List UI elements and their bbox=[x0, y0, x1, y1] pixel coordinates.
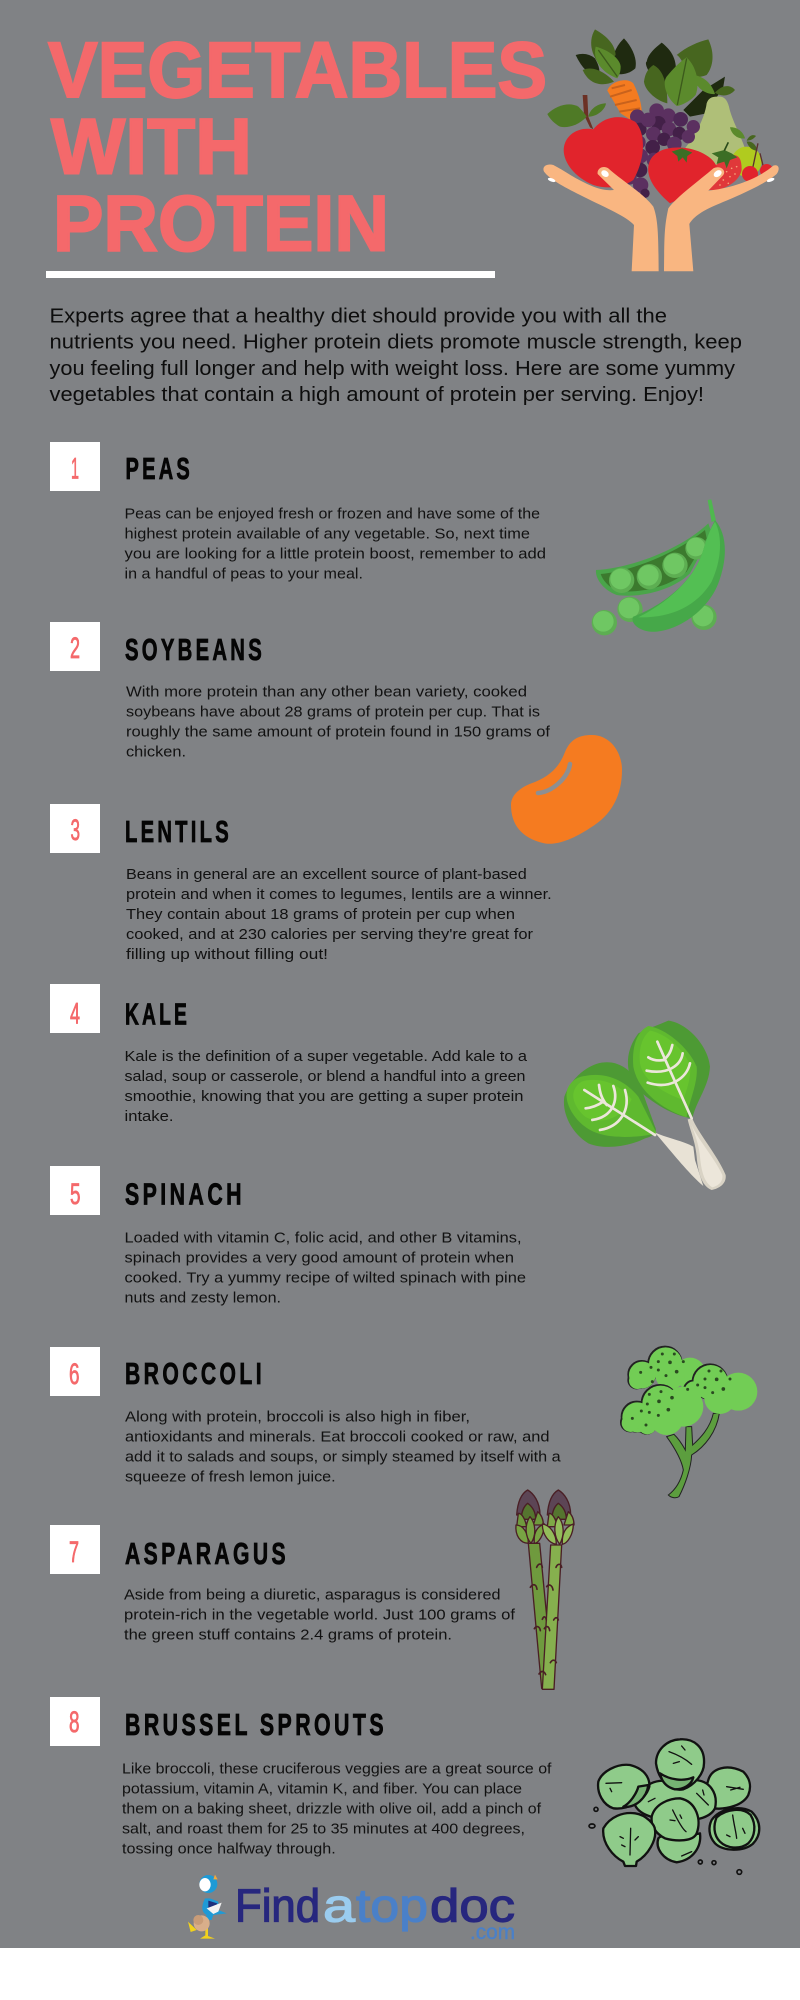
panel: peas: 1 bbox=[71, 452, 79, 485]
panel: soybeans: 2 bbox=[70, 632, 80, 665]
panel: broccoli: Along with protein, broccoli is also high in fiber, bbox=[125, 1408, 470, 1425]
panel: lentils: They contain about 18 grams of protein per cup when bbox=[126, 906, 515, 923]
panel: peas: in a handful of peas to your meal. bbox=[124, 565, 363, 582]
panel: asparagus: ASPARAGUS bbox=[125, 1536, 289, 1571]
panel: spinach: Loaded with vitamin C, folic acid, and other B vitamins, bbox=[124, 1229, 522, 1246]
title: WITH bbox=[51, 102, 252, 190]
panel: brussel sprouts: them on a baking sheet, drizzle with olive oil, add a pinch of bbox=[122, 1800, 542, 1817]
panel: broccoli: BROCCOLI bbox=[125, 1356, 265, 1391]
panel: lentils: LENTILS bbox=[125, 814, 232, 849]
panel: spinach bbox=[50, 1166, 526, 1306]
panel: asparagus bbox=[50, 1525, 516, 1643]
panel: lentils: protein and when it comes to legumes, lentils are a winner. bbox=[126, 886, 552, 903]
panel: lentils bbox=[50, 804, 552, 963]
panel: broccoli bbox=[50, 1347, 561, 1485]
panel: spinach: cooked. Try a yummy recipe of wilted spinach with pine bbox=[124, 1269, 526, 1286]
icon: pea pod bbox=[592, 499, 725, 635]
panel: spinach: nuts and zesty lemon. bbox=[124, 1289, 281, 1306]
panel: spinach: 5 bbox=[70, 1178, 80, 1211]
panel: broccoli: add it to salads and soups, or simply steamed by itself with a bbox=[125, 1448, 561, 1465]
panel: kale: Kale is the definition of a super vegetable. Add kale to a bbox=[124, 1048, 528, 1065]
logo: Findatopdoc: a bbox=[323, 1880, 356, 1932]
panel: peas: PEAS bbox=[126, 451, 193, 486]
panel: brussel sprouts: Like broccoli, these cruciferous veggies are a great source of bbox=[122, 1760, 552, 1777]
icon: kale leaves bbox=[564, 1021, 726, 1190]
panel: kale: salad, soup or casserole, or blend a handful into a green bbox=[124, 1068, 526, 1085]
panel: brussel sprouts: BRUSSEL SPROUTS bbox=[125, 1707, 387, 1742]
title underline bbox=[46, 271, 495, 278]
title bbox=[48, 25, 547, 268]
panel: kale bbox=[50, 984, 528, 1125]
panel: peas: highest protein available of any vegetable. So, next time bbox=[124, 525, 530, 542]
logo: Findatopdoc: Find bbox=[235, 1880, 320, 1932]
intro paragraph: you feeling full longer and help with weight loss. Here are some yummy bbox=[50, 358, 735, 380]
intro paragraph: Experts agree that a healthy diet should provide you with all the bbox=[50, 306, 667, 328]
panel: spinach: SPINACH bbox=[125, 1176, 245, 1212]
panel: broccoli: squeeze of fresh lemon juice. bbox=[125, 1468, 336, 1485]
panel: soybeans: roughly the same amount of protein found in 150 grams of bbox=[126, 723, 551, 740]
panel: lentils: filling up without filling out! bbox=[126, 946, 328, 963]
panel: broccoli: 6 bbox=[69, 1358, 80, 1391]
panel: soybeans: With more protein than any other bean variety, cooked bbox=[126, 683, 527, 700]
panel: soybeans: SOYBEANS bbox=[125, 632, 265, 667]
title: PROTEIN bbox=[53, 178, 389, 268]
panel: brussel sprouts bbox=[50, 1697, 552, 1857]
panel: kale: KALE bbox=[125, 996, 190, 1031]
panel: brussel sprouts: salt, and roast them for 25 to 35 minutes at 400 degrees, bbox=[122, 1820, 525, 1837]
panel: kale: 4 bbox=[70, 997, 80, 1030]
intro paragraph: vegetables that contain a high amount of protein per serving. Enjoy! bbox=[50, 384, 704, 406]
panel: brussel sprouts: tossing once halfway through. bbox=[122, 1840, 336, 1857]
title: VEGETABLES bbox=[48, 25, 547, 114]
intro paragraph bbox=[50, 306, 742, 406]
icon: orange bean bbox=[511, 735, 622, 844]
logo: Findatopdoc: top bbox=[356, 1880, 428, 1932]
panel: lentils: cooked, and at 230 calories per serving they're great for bbox=[126, 926, 533, 943]
logo: Findatopdoc: .com bbox=[470, 1921, 515, 1944]
panel: asparagus: protein-rich in the vegetable world. Just 100 grams of bbox=[124, 1606, 516, 1623]
panel: broccoli: antioxidants and minerals. Eat broccoli cooked or raw, and bbox=[125, 1428, 550, 1445]
icon: asparagus bbox=[516, 1490, 574, 1689]
panel: soybeans: chicken. bbox=[126, 743, 186, 760]
panel: peas: Peas can be enjoyed fresh or frozen and have some of the bbox=[124, 505, 540, 522]
panel: brussel sprouts: potassium, vitamin A, vitamin K, and fiber. You can place bbox=[122, 1780, 522, 1797]
icon: brussel sprouts bbox=[589, 1739, 759, 1874]
logo: Findatopdoc bbox=[188, 1875, 515, 1944]
panel: lentils: Beans in general are an excellent source of plant-based bbox=[126, 866, 527, 883]
panel: asparagus: Aside from being a diuretic, asparagus is considered bbox=[124, 1586, 501, 1603]
icon: duck mascot bbox=[188, 1875, 227, 1939]
panel: asparagus: the green stuff contains 2.4 grams of protein. bbox=[124, 1626, 452, 1643]
icon: hands holding fruit and vegetables bbox=[543, 29, 779, 271]
panel: brussel sprouts: 8 bbox=[69, 1706, 80, 1739]
panel: soybeans: soybeans have about 28 grams of protein per cup. That is bbox=[126, 703, 540, 720]
logo: Findatopdoc: doc bbox=[430, 1880, 515, 1932]
panel: soybeans bbox=[50, 622, 551, 760]
panel: spinach: spinach provides a very good amount of protein when bbox=[124, 1249, 514, 1266]
icon: broccoli bbox=[621, 1347, 757, 1498]
panel: kale: smoothie, knowing that you are getting a super protein bbox=[124, 1088, 524, 1105]
intro paragraph: nutrients you need. Higher protein diets promote muscle strength, keep bbox=[50, 332, 742, 354]
panel: lentils: 3 bbox=[70, 814, 80, 847]
panel: kale: intake. bbox=[124, 1108, 174, 1125]
panel: peas: you are looking for a little protein boost, remember to add bbox=[124, 545, 546, 562]
panel: asparagus: 7 bbox=[69, 1536, 79, 1569]
panel: peas bbox=[50, 442, 546, 582]
